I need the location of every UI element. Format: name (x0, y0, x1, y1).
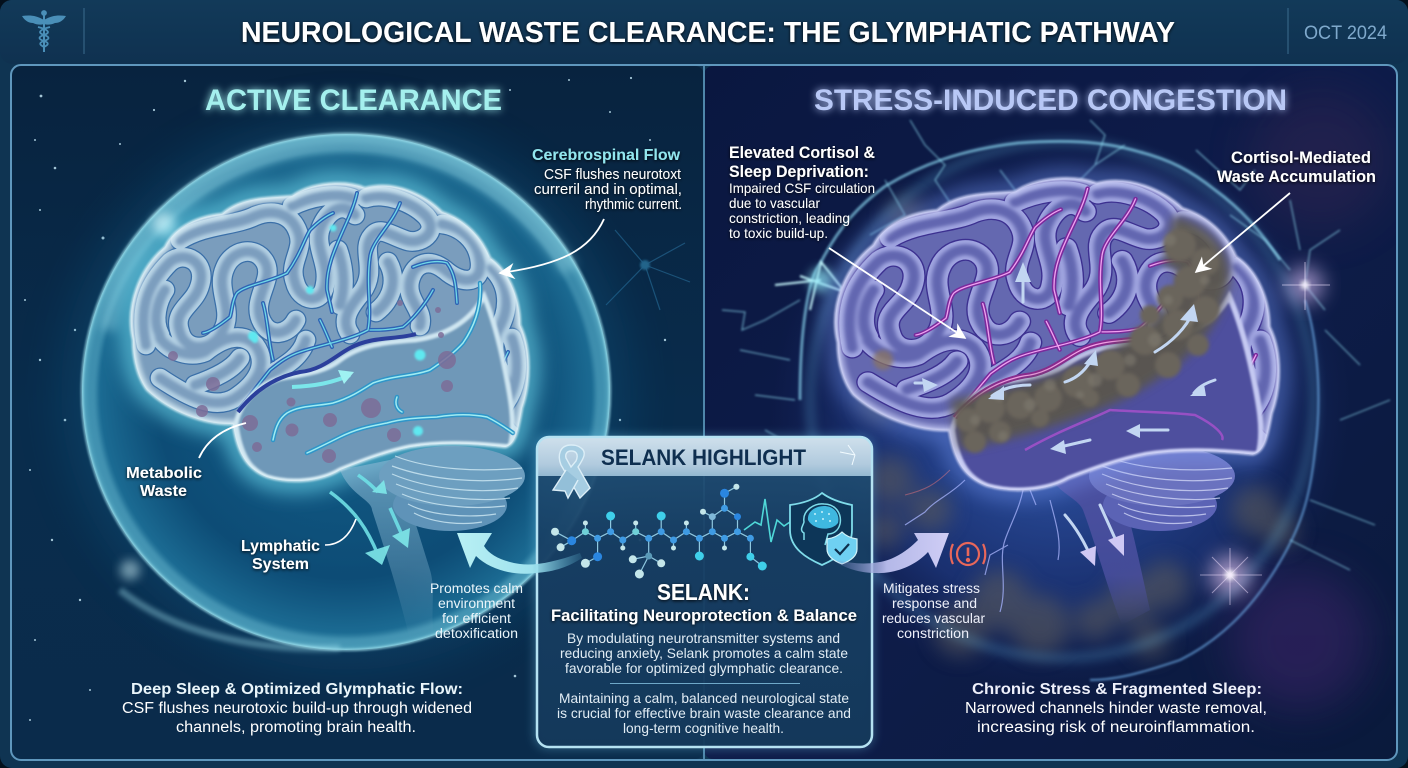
heading: active clearance: ACTIVE CLEARANCE (205, 84, 502, 117)
card body 2: is crucial for effective brain waste clearance and (557, 705, 851, 721)
arrow: right benefit (836, 533, 949, 573)
glass bubble (61, 114, 631, 670)
note: promotes calm (430, 581, 523, 641)
background smoke (860, 197, 1298, 658)
brainstem (340, 460, 433, 624)
callout: elevated cortisol: Impaired CSF circulation (729, 180, 875, 196)
card body 2: long-term cognitive health. (623, 720, 784, 736)
summary: deep sleep: CSF flushes neurotoxic build-up through widened (122, 700, 472, 717)
star field (24, 77, 681, 721)
callout: cerebrospinal flow: rhythmic current. (585, 197, 682, 213)
molecule (551, 484, 767, 578)
icon: heartbeat line (744, 499, 790, 542)
icon: alert (951, 543, 985, 565)
summary: deep sleep: channels, promoting brain health. (176, 719, 416, 736)
right brain (835, 178, 1279, 625)
card header (537, 437, 872, 476)
card header: SELANK HIGHLIGHT (601, 445, 807, 470)
summary: chronic stress: Narrowed channels hinder waste removal, (965, 700, 1267, 717)
cerebrum (835, 178, 1279, 490)
vein: lower lobe (1025, 410, 1223, 450)
left brain (131, 183, 529, 640)
card body 1: favorable for optimized glymphatic clearance. (565, 660, 843, 676)
note: promotes calm: detoxification (435, 626, 518, 641)
callout: cerebrospinal flow: Cerebrospinal Flow (532, 147, 681, 164)
card body 1: reducing anxiety, Selank promotes a calm state (560, 645, 848, 661)
card heading: SELANK: (657, 579, 750, 605)
metabolic waste blobs (168, 300, 456, 463)
callout: cerebrospinal flow (500, 147, 682, 273)
header bar (0, 0, 1408, 64)
panel: stress-induced congestion (704, 66, 1396, 759)
card subheading: Facilitating Neuroprotection & Balance (551, 606, 857, 625)
note: mitigates stress: reduces vascular (882, 611, 985, 626)
summary: deep sleep (122, 681, 472, 736)
center divider (703, 66, 705, 759)
icon: protected head (790, 493, 857, 565)
heading: stress-induced congestion: STRESS-INDUCED CONGESTION (814, 84, 1287, 117)
card body 2: Maintaining a calm, balanced neurological state (559, 690, 849, 706)
callout: cerebrospinal flow: CSF flushes neurotoxt (544, 167, 681, 183)
summary: deep sleep: Deep Sleep & Optimized Glymphatic Flow: (131, 681, 463, 698)
note: promotes calm: environment (438, 596, 515, 611)
flow arrows (915, 262, 1215, 566)
callout: metabolic waste: Metabolic (126, 465, 202, 482)
note: promotes calm: for efficient (442, 611, 511, 626)
callout: lymphatic system: System (252, 556, 309, 573)
panel: active clearance (12, 66, 704, 759)
lightning ring (722, 120, 1390, 680)
callout: cerebrospinal flow: curreril and in optimal, (534, 182, 682, 198)
summary: chronic stress (965, 681, 1267, 736)
callout: elevated cortisol: Sleep Deprivation: (729, 163, 869, 181)
callout: lymphatic system (241, 519, 356, 573)
callout: waste accumulation: Cortisol-Mediated (1231, 149, 1371, 167)
callout: elevated cortisol: due to vascular (729, 195, 820, 211)
cerebellum (379, 446, 525, 531)
cerebrum base (132, 184, 527, 426)
callout: lymphatic system: Lymphatic (241, 538, 320, 555)
card body 2 (557, 690, 851, 736)
CSF glow dots (248, 224, 426, 436)
note: promotes calm: Promotes calm (430, 581, 523, 596)
waste smoke (955, 229, 1219, 453)
note: mitigates stress (882, 581, 985, 641)
brainstem (1056, 472, 1150, 618)
note: mitigates stress: response and (892, 596, 977, 611)
callout: elevated cortisol: Elevated Cortisol & (729, 144, 875, 162)
note: mitigates stress: Mitigates stress (883, 581, 980, 596)
card body 1 (560, 630, 848, 676)
cerebellum (1089, 446, 1235, 531)
energy aura (798, 158, 1322, 664)
temporal lobe (953, 296, 1261, 490)
lymphatic flow arrows (330, 475, 410, 565)
date: OCT 2024 (1304, 23, 1387, 44)
callout: metabolic waste: Waste (140, 483, 187, 500)
flow arrow on brain (292, 370, 354, 387)
title: NEUROLOGICAL WASTE CLEARANCE: THE GLYMPHATIC PATHWAY (241, 17, 1175, 49)
callout: waste accumulation (1196, 149, 1376, 272)
arrow: left benefit (457, 533, 582, 574)
summary: chronic stress: Chronic Stress & Fragmented Sleep: (972, 681, 1262, 698)
icon: caduceus (22, 11, 66, 52)
note: mitigates stress: constriction (897, 626, 969, 641)
temporal lobe (236, 283, 513, 481)
neuron background left (606, 230, 690, 310)
icon: ribbon (553, 445, 590, 498)
card body 1: By modulating neurotransmitter systems and (567, 630, 840, 646)
summary: chronic stress: increasing risk of neuroinflammation. (977, 719, 1255, 736)
callout: elevated cortisol: constriction, leading (729, 210, 850, 226)
callout: metabolic waste (126, 423, 246, 500)
callout: waste accumulation: Waste Accumulation (1217, 168, 1376, 186)
card: selank highlight (534, 435, 874, 749)
callout: elevated cortisol (729, 144, 965, 338)
callout: elevated cortisol: to toxic build-up. (729, 225, 828, 241)
